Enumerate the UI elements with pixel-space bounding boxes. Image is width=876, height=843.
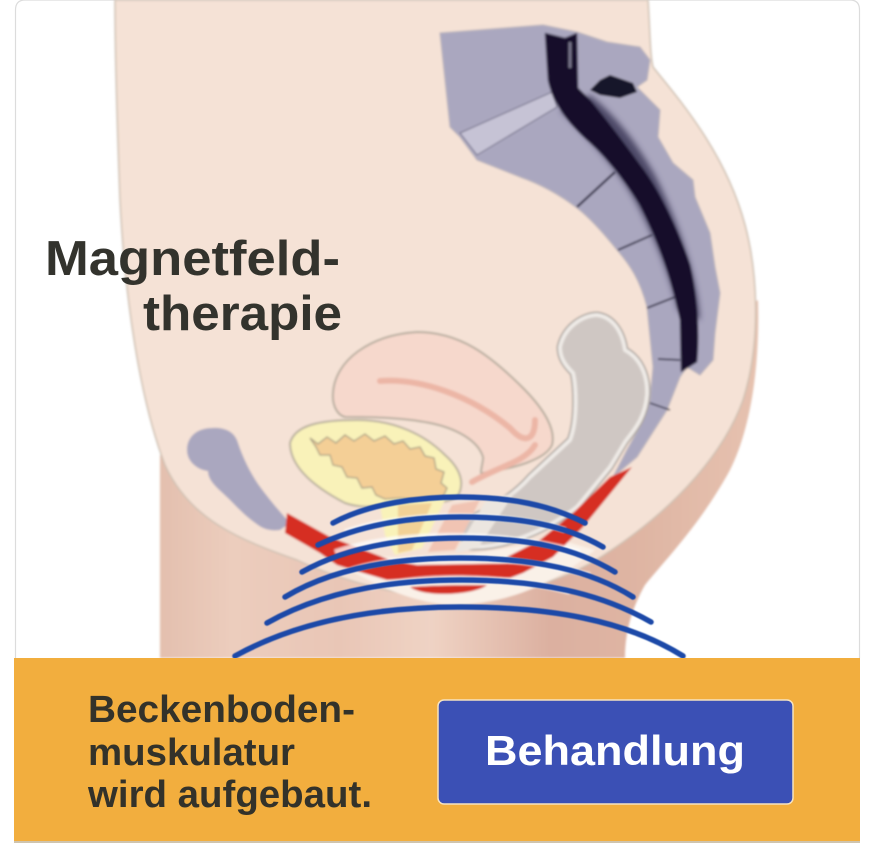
urethra and vagina bbox=[380, 500, 445, 555]
button bbox=[438, 700, 793, 804]
bottom banner bbox=[14, 658, 860, 843]
title bbox=[45, 232, 342, 341]
bladder bbox=[290, 420, 461, 507]
banner bottom edge bbox=[14, 841, 860, 843]
title line 1: Magnetfeld- bbox=[45, 232, 340, 286]
wave 4 bbox=[285, 558, 633, 597]
sacral segment lines bbox=[577, 172, 680, 410]
uterus bbox=[333, 332, 553, 474]
banner text: muskulatur bbox=[88, 732, 295, 774]
canal soft shadow bbox=[560, 95, 700, 320]
bladder interior bbox=[310, 434, 447, 500]
banner text: Beckenboden- bbox=[88, 689, 355, 731]
button: Behandlung bbox=[485, 727, 745, 774]
lower muscle segment bbox=[410, 585, 487, 594]
pelvic floor muscle bbox=[285, 467, 632, 580]
leg and buttock bbox=[160, 300, 758, 658]
title line 2: therapie bbox=[143, 287, 342, 341]
wave 2 bbox=[318, 517, 603, 547]
rectum bbox=[455, 315, 647, 547]
sacrum light segment bbox=[460, 92, 557, 155]
canal side blob bbox=[590, 75, 637, 98]
banner text bbox=[87, 689, 372, 816]
magnetic field waves bbox=[235, 497, 683, 656]
sacrum and coccyx bbox=[440, 25, 720, 477]
banner text: wird aufgebaut. bbox=[87, 774, 372, 816]
pale band under pelvic floor bbox=[356, 542, 594, 604]
canal highlight bbox=[568, 42, 572, 68]
illustration: pelvic cross-section bbox=[115, 0, 758, 658]
wave 3 bbox=[302, 538, 615, 572]
wave 6 bbox=[235, 607, 683, 656]
card outline bbox=[16, 0, 860, 658]
white streaks bbox=[335, 516, 590, 592]
body torso bbox=[115, 0, 756, 598]
spinal canal bbox=[545, 33, 698, 372]
wave 5 bbox=[267, 580, 651, 623]
uterine cavity bbox=[380, 381, 535, 482]
wave 1 bbox=[333, 497, 585, 523]
pubic bone bbox=[187, 428, 290, 530]
